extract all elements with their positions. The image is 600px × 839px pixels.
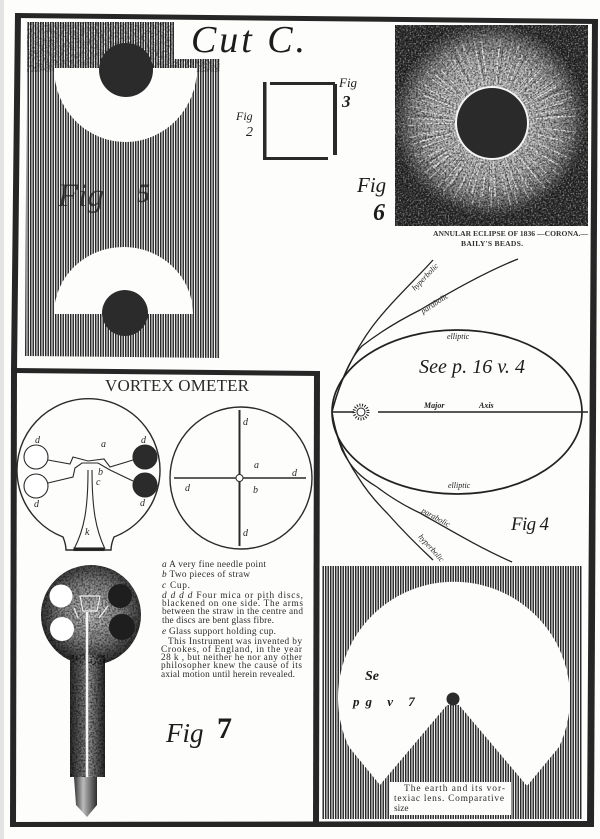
moon disc — [455, 86, 529, 160]
panel: earth vortex lens — [322, 566, 582, 819]
legend text block: c Cup. — [162, 581, 190, 591]
orbit labels: parabolic — [419, 505, 452, 529]
orbit labels: parabolic — [418, 291, 451, 316]
label: Fig 6 — [356, 173, 386, 226]
parabolic upper — [332, 259, 518, 412]
label: Fig 5 — [57, 178, 150, 214]
caption box — [390, 782, 511, 815]
major axis — [332, 411, 588, 413]
diagram letters: a — [254, 460, 259, 471]
hyperbolic upper — [332, 260, 433, 412]
white half disc lower — [54, 247, 193, 314]
diagram letters: d — [243, 417, 249, 428]
label: Fig 3: Fig — [338, 75, 358, 90]
title: Cut C.: Cut C. — [191, 19, 305, 61]
label: Fig 5: 5 — [137, 179, 150, 208]
eclipse caption: ANNULAR ECLIPSE OF 1836 —CORONA.— — [433, 229, 588, 238]
label: Fig 6: Fig — [356, 173, 386, 197]
legend text block: blackened on one side. The arms — [162, 599, 303, 609]
orbit labels: hyperbolic — [410, 261, 441, 292]
earth — [446, 692, 460, 706]
diagram letters: d — [185, 483, 191, 494]
orbit labels: Major — [423, 401, 445, 410]
vanes and support — [48, 457, 133, 549]
legend text block: between the straw in the centre and — [162, 607, 303, 617]
diagram letters: b — [253, 485, 258, 496]
panel border — [10, 368, 320, 826]
dark sphere lower — [102, 290, 148, 336]
panel: fig 5 hatched plate — [25, 22, 220, 358]
illustration: radiometer bulb engraving — [41, 565, 141, 817]
legend text block: d d d d Four mica or pith discs, — [162, 591, 303, 601]
parabolic lower — [332, 412, 512, 562]
note: see p 9 v 7: pg v 7 — [352, 694, 421, 709]
heading: VORTEX OMETER — [105, 376, 250, 395]
chart: fig 4 orbits — [332, 259, 588, 562]
legend text block: e Glass support holding cup. — [162, 627, 276, 637]
label: Fig 2: Fig — [235, 109, 253, 123]
note: see p.16 v.4: See p. 16 v. 4 — [419, 356, 525, 378]
sun — [354, 405, 368, 419]
label: Fig 6: 6 — [373, 200, 385, 226]
orbit labels: elliptic — [447, 332, 470, 341]
diagram letters: c — [96, 477, 101, 488]
legend text block: a A very fine needle point — [162, 559, 266, 570]
label: Fig 3 — [338, 75, 358, 111]
panel: annular eclipse — [394, 24, 588, 226]
legend text block: the discs are bent glass fibre. — [162, 615, 274, 626]
diagram letters — [34, 417, 298, 539]
hyperbolic lower — [332, 412, 433, 560]
discs — [24, 445, 157, 498]
diagram letters: b — [98, 467, 103, 478]
note: see p 9 v 7: Se — [365, 669, 379, 684]
corona rays — [424, 55, 560, 191]
diagram letters: d — [243, 528, 249, 539]
diagram letters: d — [141, 435, 147, 446]
orbit labels — [410, 261, 494, 564]
orbit labels: hyperbolic — [417, 532, 446, 564]
caption box: The earth and its vor- — [404, 784, 505, 794]
label: Fig 3: 3 — [341, 92, 351, 111]
label: Fig 4: Fig 4 — [510, 514, 550, 535]
legend text block: This Instrument was invented by — [168, 637, 302, 647]
dark sphere upper — [99, 43, 153, 97]
legend text block: axial motion until herein revealed. — [161, 670, 295, 680]
eclipse caption — [433, 229, 588, 248]
caption box: texiac lens. Comparative — [394, 794, 504, 804]
diagram: radiometer side view — [17, 399, 160, 550]
panel: vortex ometer — [10, 368, 320, 826]
legend text block: 28 k , but neither he nor any other — [161, 653, 303, 663]
label: Fig 2: 2 — [246, 125, 253, 140]
orbit labels: elliptic — [448, 481, 471, 490]
diagram: radiometer top view — [170, 407, 312, 549]
figure 2 and 3 square — [235, 75, 358, 160]
glass support — [86, 612, 88, 777]
diagram letters: d — [35, 435, 41, 446]
diagram letters: k — [85, 527, 90, 538]
label: Fig 7: 7 — [217, 712, 232, 745]
label: Fig 5: Fig — [57, 178, 104, 214]
label: Fig 7 — [165, 712, 232, 748]
orbit labels: Axis — [478, 401, 494, 410]
white half disc upper — [54, 68, 197, 142]
legend text block — [161, 559, 303, 680]
legend text block: Crookes, of England, in the year — [161, 644, 303, 655]
label: Fig 2 — [235, 109, 253, 140]
note: see p 9 v 7 — [352, 669, 421, 709]
legend text block: b Two pieces of straw — [162, 569, 250, 580]
vortex lens shape — [338, 582, 570, 786]
label: Fig 7: Fig — [165, 718, 204, 748]
bulb discs — [50, 584, 135, 641]
diagram letters: d — [292, 468, 298, 479]
diagram letters: d — [140, 498, 146, 509]
diagram letters: d — [34, 499, 40, 510]
diagram letters: a — [101, 439, 106, 450]
ellipse orbit — [332, 330, 582, 494]
eclipse caption: BAILY'S BEADS. — [461, 239, 523, 248]
caption box: size — [394, 804, 409, 814]
legend text block: philosopher knew the cause of its — [161, 660, 302, 671]
